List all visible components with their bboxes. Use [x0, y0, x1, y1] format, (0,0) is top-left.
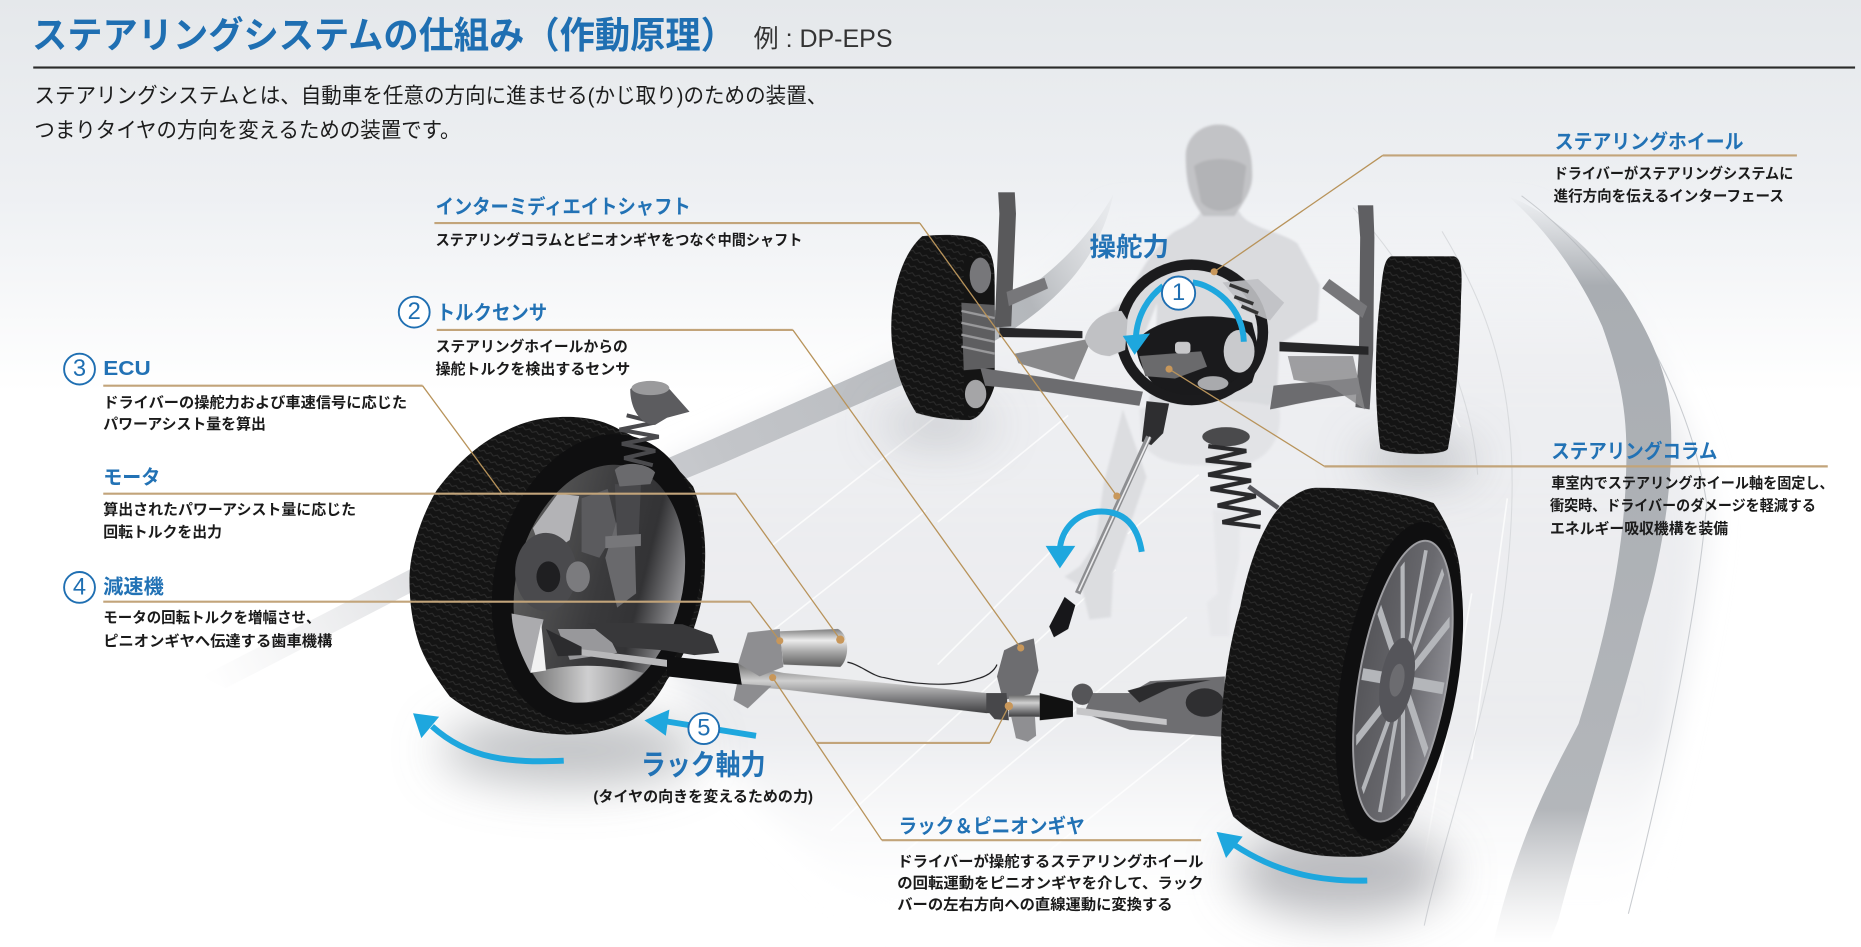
label: rack and pinion: バーの左右方向への直線運動に変換する: [897, 895, 1173, 913]
label: ECU: ECU: [103, 358, 151, 380]
label: motor: [103, 466, 356, 541]
label: reducer: 減速機: [103, 574, 164, 598]
title: ステアリングシステムの仕組み（作動原理）: [32, 15, 736, 56]
intro text: [34, 84, 827, 143]
label: torque sensor: トルクセンサ: [437, 301, 547, 324]
leg right: [1207, 510, 1240, 636]
ground shadows: [439, 412, 1475, 917]
rear-left wheel: [891, 235, 995, 420]
label: steering wheel: [1554, 129, 1793, 205]
label: rack and pinion: [897, 815, 1204, 913]
road surface: [202, 195, 1707, 943]
label: reducer: 4: [73, 574, 86, 600]
label: intermediate shaft: ステアリングコラムとピニオンギヤをつなぐ中間シャフト: [436, 231, 802, 249]
right lane stripe: [1493, 196, 1671, 943]
front-right wheel: [1221, 488, 1485, 857]
label: rack and pinion: の回転運動をピニオンギヤを介して、ラック: [897, 875, 1203, 892]
label: steering column: 車室内でステアリングホイール軸を固定し、: [1551, 474, 1834, 492]
label: rack and pinion: ラック＆ピニオンギヤ: [898, 815, 1085, 838]
inner barrel: [533, 666, 643, 703]
label: intermediate shaft: インターミディエイトシャフト: [436, 195, 691, 219]
label: reducer: [64, 572, 332, 650]
left lane stripe: [202, 195, 1113, 688]
label: torque sensor: ステアリングホイールからの: [436, 338, 628, 356]
label: ECU: 3: [73, 356, 86, 382]
leader lines: [103, 155, 1828, 840]
header rule: [33, 66, 1855, 69]
head: [1186, 125, 1252, 216]
label: steering column: 衝突時、ドライバーのダメージを軽減する: [1550, 497, 1816, 515]
steering wheel: [1120, 265, 1263, 401]
background gradient: [0, 0, 1861, 392]
label: steering force: 操舵力: [1090, 232, 1169, 262]
blue arrow: right tire direction: [1217, 832, 1367, 881]
road texture lines: [760, 285, 1507, 926]
label: torque sensor: [399, 297, 630, 378]
leg left: [1065, 409, 1147, 619]
front strut and spring right: [1202, 427, 1278, 527]
intro text: ステアリングシステムとは、自動車を任意の方向に進ませる(かじ取り)のための装置、: [34, 84, 827, 108]
label: motor: 回転トルクを出力: [103, 524, 222, 541]
column and intermediate shaft: [1049, 401, 1169, 637]
blue arrow: rack axial force: [644, 710, 756, 736]
label: rack axial force: (タイヤの向きを変えるための力): [593, 787, 813, 805]
marker 1: 1: [1172, 280, 1185, 306]
rear suspension: [980, 192, 1374, 409]
rear-right wheel: [1376, 256, 1462, 454]
label: ECU: [64, 354, 407, 433]
label: torque sensor: 操舵トルクを検出するセンサ: [436, 360, 630, 378]
label: reducer: モータの回転トルクを増幅させ、: [103, 608, 320, 626]
label: steering wheel: ステアリングホイール: [1555, 129, 1744, 153]
blue arrow: steering wheel rotation: [1123, 282, 1244, 355]
label: steering column: ステアリングコラム: [1551, 439, 1717, 463]
blue arrow: shaft rotation: [1046, 511, 1142, 568]
torso and arms: [1101, 208, 1320, 411]
label: ECU: パワーアシスト量を算出: [103, 415, 266, 433]
driver hands on the wheel: [1085, 279, 1284, 356]
label: motor: 算出されたパワーアシスト量に応じた: [103, 500, 356, 518]
marker 1: [1162, 277, 1195, 310]
subtitle: 例 : DP-EPS: [754, 25, 893, 53]
driver figure: [1065, 125, 1320, 636]
steering rack assembly: [733, 629, 1225, 742]
label: rack and pinion: ドライバーが操舵するステアリングホイール: [897, 853, 1204, 871]
spokes: [533, 494, 579, 558]
label: rack axial force: ラック軸力: [641, 749, 766, 781]
knuckle: [582, 489, 617, 558]
label: steering wheel: ドライバーがステアリングシステムに: [1554, 164, 1793, 182]
knee and hips: [1139, 401, 1280, 466]
intro text: つまりタイヤの方向を変えるための装置です。: [34, 119, 461, 143]
label: steering column: [1550, 439, 1834, 537]
brake disc: [515, 533, 577, 611]
label: rack axial force: 5: [697, 716, 710, 742]
label: steering wheel: 進行方向を伝えるインターフェース: [1554, 187, 1784, 205]
label: intermediate shaft: [436, 195, 802, 249]
label: motor: モータ: [103, 466, 160, 489]
steering column block: [1139, 351, 1207, 379]
label: torque sensor: 2: [408, 299, 421, 325]
blue arrow: left tire direction: [413, 713, 564, 761]
left lower arm and tie rod: [546, 623, 742, 685]
label: reducer: ピニオンギヤへ伝達する歯車機構: [103, 632, 332, 650]
front-left strut and spring: [605, 381, 690, 608]
label: rack axial force: [593, 713, 813, 805]
label: steering column: エネルギー吸収機構を装備: [1550, 519, 1728, 537]
label: ECU: ドライバーの操舵力および車速信号に応じた: [103, 393, 407, 411]
front-left wheel: [409, 412, 732, 747]
